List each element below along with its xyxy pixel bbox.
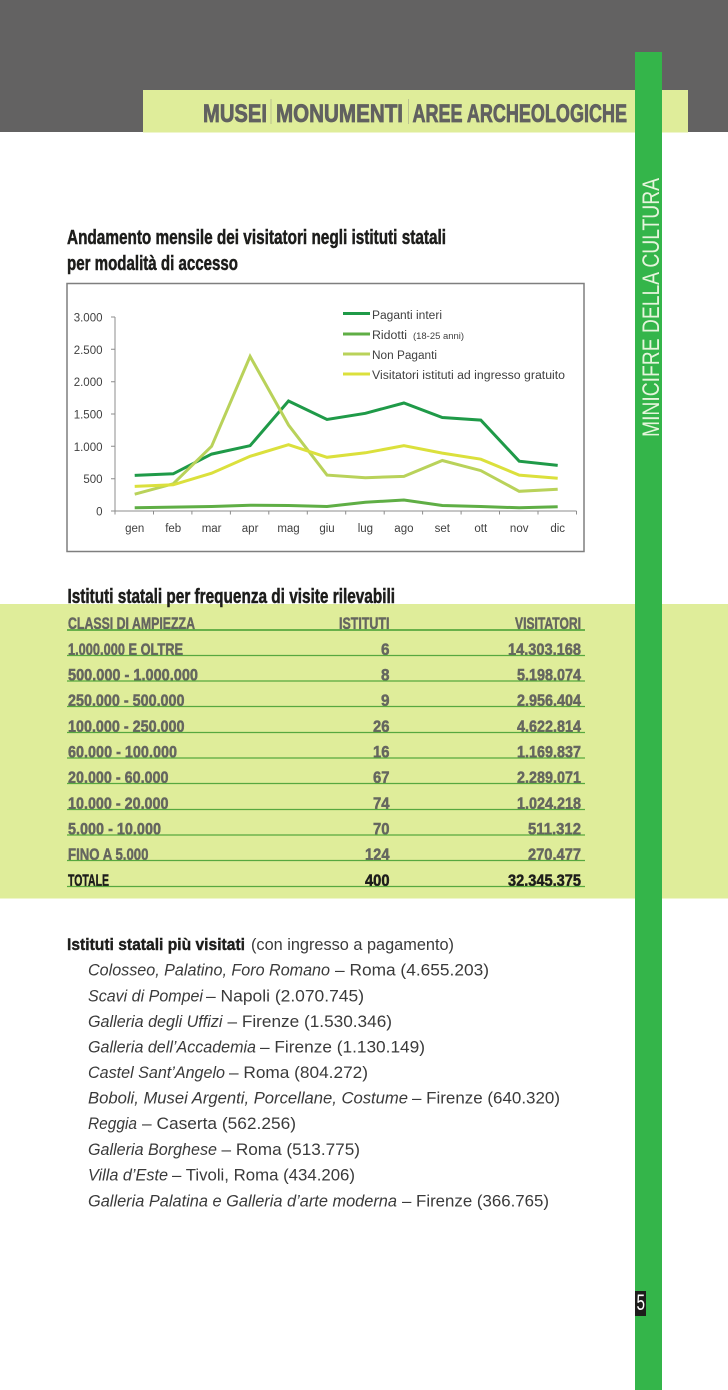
- chart y axis labels: 0: [96, 506, 102, 518]
- table row: 100.000 - 250.000: 4.622.814: [517, 717, 581, 736]
- table row: 500.000 - 1.000.000: [67, 666, 585, 684]
- page number: 5: [636, 1290, 645, 1315]
- table row: 1.000.000 e oltre: [67, 640, 585, 659]
- table header row: VISITATORI: [515, 614, 581, 633]
- table row: fino a 5.000: 124: [365, 845, 390, 864]
- heading: most visited institutes: (con ingresso a pagamento): [251, 935, 454, 954]
- heading: most visited institutes: [67, 935, 454, 954]
- list item: borghese: Galleria Borghese: [88, 1140, 217, 1159]
- chart x axis month labels: mag: [277, 523, 300, 535]
- page number: [635, 1290, 646, 1316]
- title: musei monumenti aree archeologiche: MONUMENTI: [276, 100, 403, 128]
- table row: 10.000 - 20.000: 1.024.218: [517, 794, 581, 813]
- table row: totale: 32.345.375: [508, 871, 581, 890]
- title: musei monumenti aree archeologiche: [203, 99, 627, 128]
- series: visitatori istituti gratuiti: [135, 445, 558, 486]
- table header row: [67, 614, 585, 633]
- table row: 250.000 - 500.000: 2.956.404: [517, 691, 581, 710]
- table row: 250.000 - 500.000: 250.000 - 500.000: [68, 691, 184, 710]
- table row: 20.000 - 60.000: 2.289.071: [517, 768, 581, 787]
- table row: fino a 5.000: 270.477: [528, 845, 581, 864]
- list item: uffizi: [88, 1012, 392, 1031]
- list item: galleria palatina: – Firenze (366.765): [402, 1192, 549, 1210]
- chart x axis month labels: apr: [242, 523, 259, 535]
- chart y axis labels: 2.500: [74, 345, 102, 357]
- table row: 5.000 - 10.000: [67, 820, 585, 838]
- chart legend: (18-25 anni): [413, 331, 464, 341]
- list item: castel sant'angelo: – Roma (804.272): [229, 1063, 368, 1082]
- chart x axis month labels: nov: [510, 523, 529, 535]
- list item: colosseo: – Roma (4.655.203): [335, 961, 489, 980]
- chart legend: Visitatori istituti ad ingresso gratuito: [372, 370, 565, 382]
- table row: 5.000 - 10.000: 70: [373, 820, 390, 838]
- chart x axis month labels: giu: [319, 523, 335, 535]
- list item: pompei: – Napoli (2.070.745): [206, 986, 364, 1006]
- chart x axis month labels: gen: [125, 523, 144, 535]
- title: musei monumenti aree archeologiche: MUSEI: [203, 100, 267, 128]
- table row: 1.000.000 e oltre: 14.303.168: [508, 640, 581, 659]
- list item: boboli: Boboli, Musei Argenti, Porcellane, Costume: [88, 1088, 408, 1108]
- chart y axis labels: 1.000: [74, 442, 102, 454]
- table row: 10.000 - 20.000: 74: [373, 794, 390, 813]
- table row: 10.000 - 20.000: 10.000 - 20.000: [68, 794, 168, 813]
- table row: 100.000 - 250.000: 26: [373, 717, 390, 736]
- list item: castel sant'angelo: Castel Sant’Angelo: [88, 1063, 225, 1082]
- table row: 10.000 - 20.000: [67, 794, 585, 813]
- table header row: CLASSI DI AMPIEZZA: [68, 614, 195, 633]
- list item: colosseo: [88, 961, 489, 980]
- chart x axis month labels: mar: [202, 523, 222, 535]
- table row: 20.000 - 60.000: [67, 768, 585, 787]
- title: musei monumenti aree archeologiche: AREE ARCHEOLOGICHE: [412, 100, 627, 128]
- list: most visited institutes: [88, 961, 560, 1210]
- list item: accademia: Galleria dell’Accademia: [88, 1038, 256, 1057]
- heading: frequency table: Istituti statali per frequenza di visite rilevabili: [68, 586, 395, 608]
- table row: 20.000 - 60.000: 67: [373, 768, 390, 787]
- table background band: [0, 604, 728, 898]
- table row: 20.000 - 60.000: 20.000 - 60.000: [68, 768, 168, 787]
- line chart panel: [67, 284, 584, 552]
- list item: uffizi: Galleria degli Uffizi: [88, 1012, 224, 1031]
- chart axes: [111, 317, 576, 514]
- table row: 100.000 - 250.000: 100.000 - 250.000: [68, 717, 184, 736]
- chart x axis month labels: set: [435, 523, 451, 535]
- table row: totale: [67, 871, 585, 890]
- list item: boboli: – Firenze (640.320): [412, 1088, 560, 1108]
- list item: galleria palatina: [88, 1192, 549, 1210]
- chart legend: [343, 310, 565, 382]
- table row: totale: 400: [365, 871, 390, 890]
- list item: accademia: [88, 1038, 425, 1057]
- table row: fino a 5.000: FINO A 5.000: [68, 845, 148, 864]
- chart legend: Non Paganti: [372, 350, 437, 362]
- table row: 1.000.000 e oltre: 6: [381, 640, 390, 659]
- list item: galleria palatina: Galleria Palatina e Galleria d’arte moderna: [88, 1192, 397, 1210]
- series: ridotti: [135, 500, 558, 508]
- table row: 5.000 - 10.000: 5.000 - 10.000: [68, 820, 161, 838]
- chart x axis month labels: lug: [358, 523, 373, 535]
- list item: villa d'este: [88, 1166, 355, 1185]
- heading: most visited institutes: Istituti statali più visitati: [67, 935, 245, 954]
- heading: monthly trend: [67, 227, 446, 275]
- table row: 500.000 - 1.000.000: 500.000 - 1.000.000: [68, 666, 198, 684]
- table row: 250.000 - 500.000: [67, 691, 585, 710]
- series: paganti interi: [135, 401, 558, 475]
- table row: totale: TOTALE: [68, 871, 109, 890]
- list item: borghese: – Roma (513.775): [222, 1140, 360, 1159]
- list item: pompei: Scavi di Pompei: [88, 986, 204, 1006]
- list item: villa d'este: Villa d’Este: [88, 1166, 168, 1185]
- table: institutes by visit class: [67, 614, 585, 890]
- chart x axis month labels: feb: [165, 523, 181, 535]
- table row: 250.000 - 500.000: 9: [381, 691, 390, 710]
- chart legend: Ridotti: [372, 330, 407, 342]
- list item: accademia: – Firenze (1.130.149): [260, 1038, 425, 1057]
- list item: reggia: Reggia: [88, 1114, 137, 1133]
- vertical label: minicifre della cultura: MINICIFRE DELLA CULTURA: [638, 178, 665, 437]
- chart y axis labels: 2.000: [74, 377, 102, 389]
- list item: villa d'este: – Tivoli, Roma (434.206): [172, 1166, 355, 1185]
- list item: colosseo: Colosseo, Palatino, Foro Romano: [88, 961, 330, 980]
- chart y axis labels: 3.000: [74, 312, 102, 324]
- table row: 1.000.000 e oltre: 1.000.000 E OLTRE: [68, 640, 183, 659]
- table row: 60.000 - 100.000: 16: [373, 742, 390, 762]
- chart x axis month labels: ott: [474, 523, 488, 535]
- table header row: ISTITUTI: [339, 614, 390, 633]
- chart x axis month labels: ago: [394, 523, 413, 535]
- heading: monthly trend: Andamento mensile dei visitatori negli istituti statali: [67, 227, 446, 249]
- chart x axis month labels: dic: [550, 523, 565, 535]
- header band: dark grey: [0, 0, 728, 132]
- list item: castel sant'angelo: [88, 1063, 368, 1082]
- list item: pompei: [88, 986, 364, 1006]
- table row: 500.000 - 1.000.000: 8: [381, 666, 390, 684]
- table row: 60.000 - 100.000: [67, 742, 585, 762]
- table row: 500.000 - 1.000.000: 5.198.074: [517, 666, 581, 684]
- series: non paganti: [135, 356, 558, 494]
- chart y axis labels: 500: [83, 474, 102, 486]
- table row: 60.000 - 100.000: 60.000 - 100.000: [68, 742, 177, 762]
- list item: boboli: [88, 1088, 560, 1108]
- table row: fino a 5.000: [67, 845, 585, 864]
- heading: monthly trend: per modalità di accesso: [67, 253, 238, 275]
- table row: 60.000 - 100.000: 1.169.837: [517, 742, 581, 762]
- table row: 5.000 - 10.000: 511.312: [528, 820, 581, 838]
- chart y axis labels: 1.500: [74, 410, 102, 422]
- chart x axis month labels: [125, 523, 565, 535]
- header band: light green title strip: [143, 90, 688, 132]
- vertical green side stripe: [635, 52, 662, 1390]
- list item: borghese: [88, 1140, 360, 1159]
- list item: uffizi: – Firenze (1.530.346): [228, 1012, 392, 1031]
- list item: reggia: – Caserta (562.256): [142, 1114, 296, 1133]
- table row: 100.000 - 250.000: [67, 717, 585, 736]
- chart y axis labels: [74, 312, 102, 518]
- chart legend: Paganti interi: [372, 310, 442, 322]
